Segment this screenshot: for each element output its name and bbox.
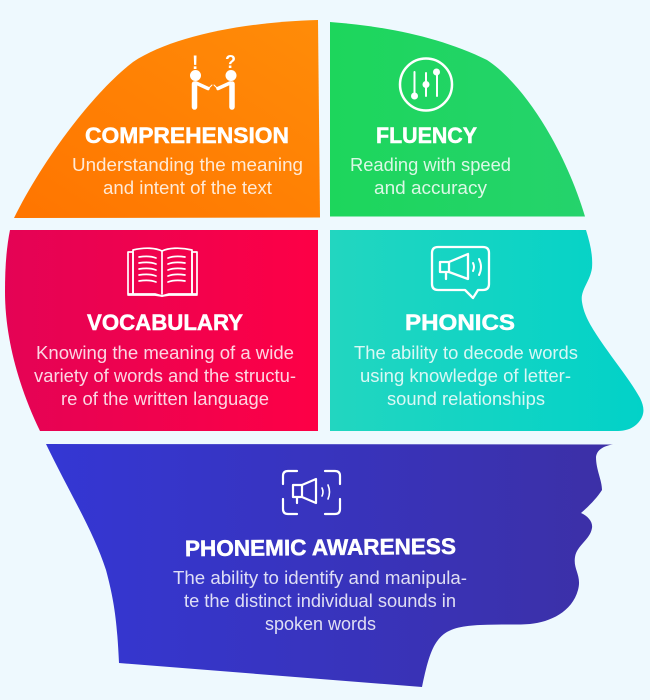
text: phonics description <box>354 342 578 409</box>
text: phonics description: using knowledge of letter- <box>360 365 571 386</box>
heading: phonemic awareness: PHONEMIC AWARENESS <box>185 534 456 561</box>
panel: phonics <box>330 230 643 431</box>
text: phonics description: sound relationships <box>387 388 545 409</box>
heading: phonics: PHONICS <box>405 310 515 335</box>
text: comprehension description <box>72 154 303 198</box>
text: vocabulary description: Knowing the meaning of a wide <box>36 342 294 363</box>
panel: vocabulary <box>5 230 318 431</box>
text: phonemic awareness description: te the distinct individual sounds in <box>184 590 456 611</box>
icon: megaphone speech bubble <box>432 247 489 298</box>
text: fluency description: Reading with speed <box>350 154 511 175</box>
text: vocabulary description <box>34 342 296 409</box>
panel: fluency <box>330 22 585 216</box>
icon: two people talking <box>190 52 236 107</box>
panel: comprehension <box>14 20 320 218</box>
icon: open book <box>128 248 197 296</box>
panel: phonemic awareness <box>46 444 613 687</box>
icon: two people talking: ? <box>225 52 236 72</box>
text: phonics description: The ability to decode words <box>354 342 578 363</box>
icon: megaphone in focus frame <box>283 471 340 514</box>
text: vocabulary description: re of the written language <box>61 388 269 409</box>
heading: vocabulary: VOCABULARY <box>87 310 243 335</box>
text: phonemic awareness description <box>173 567 467 634</box>
icon: sliders in circle <box>400 58 452 110</box>
heading: comprehension: COMPREHENSION <box>85 123 289 148</box>
text: comprehension description: and intent of the text <box>103 177 272 198</box>
text: comprehension description: Understanding the meaning <box>72 154 303 175</box>
text: vocabulary description: variety of words and the structu- <box>34 365 296 386</box>
heading: fluency: FLUENCY <box>376 123 477 148</box>
icon: two people talking: ! <box>192 53 198 74</box>
text: fluency description <box>350 154 511 198</box>
text: phonemic awareness description: The ability to identify and manipula- <box>173 567 467 588</box>
text: fluency description: and accuracy <box>374 177 488 198</box>
text: phonemic awareness description: spoken words <box>265 613 376 634</box>
